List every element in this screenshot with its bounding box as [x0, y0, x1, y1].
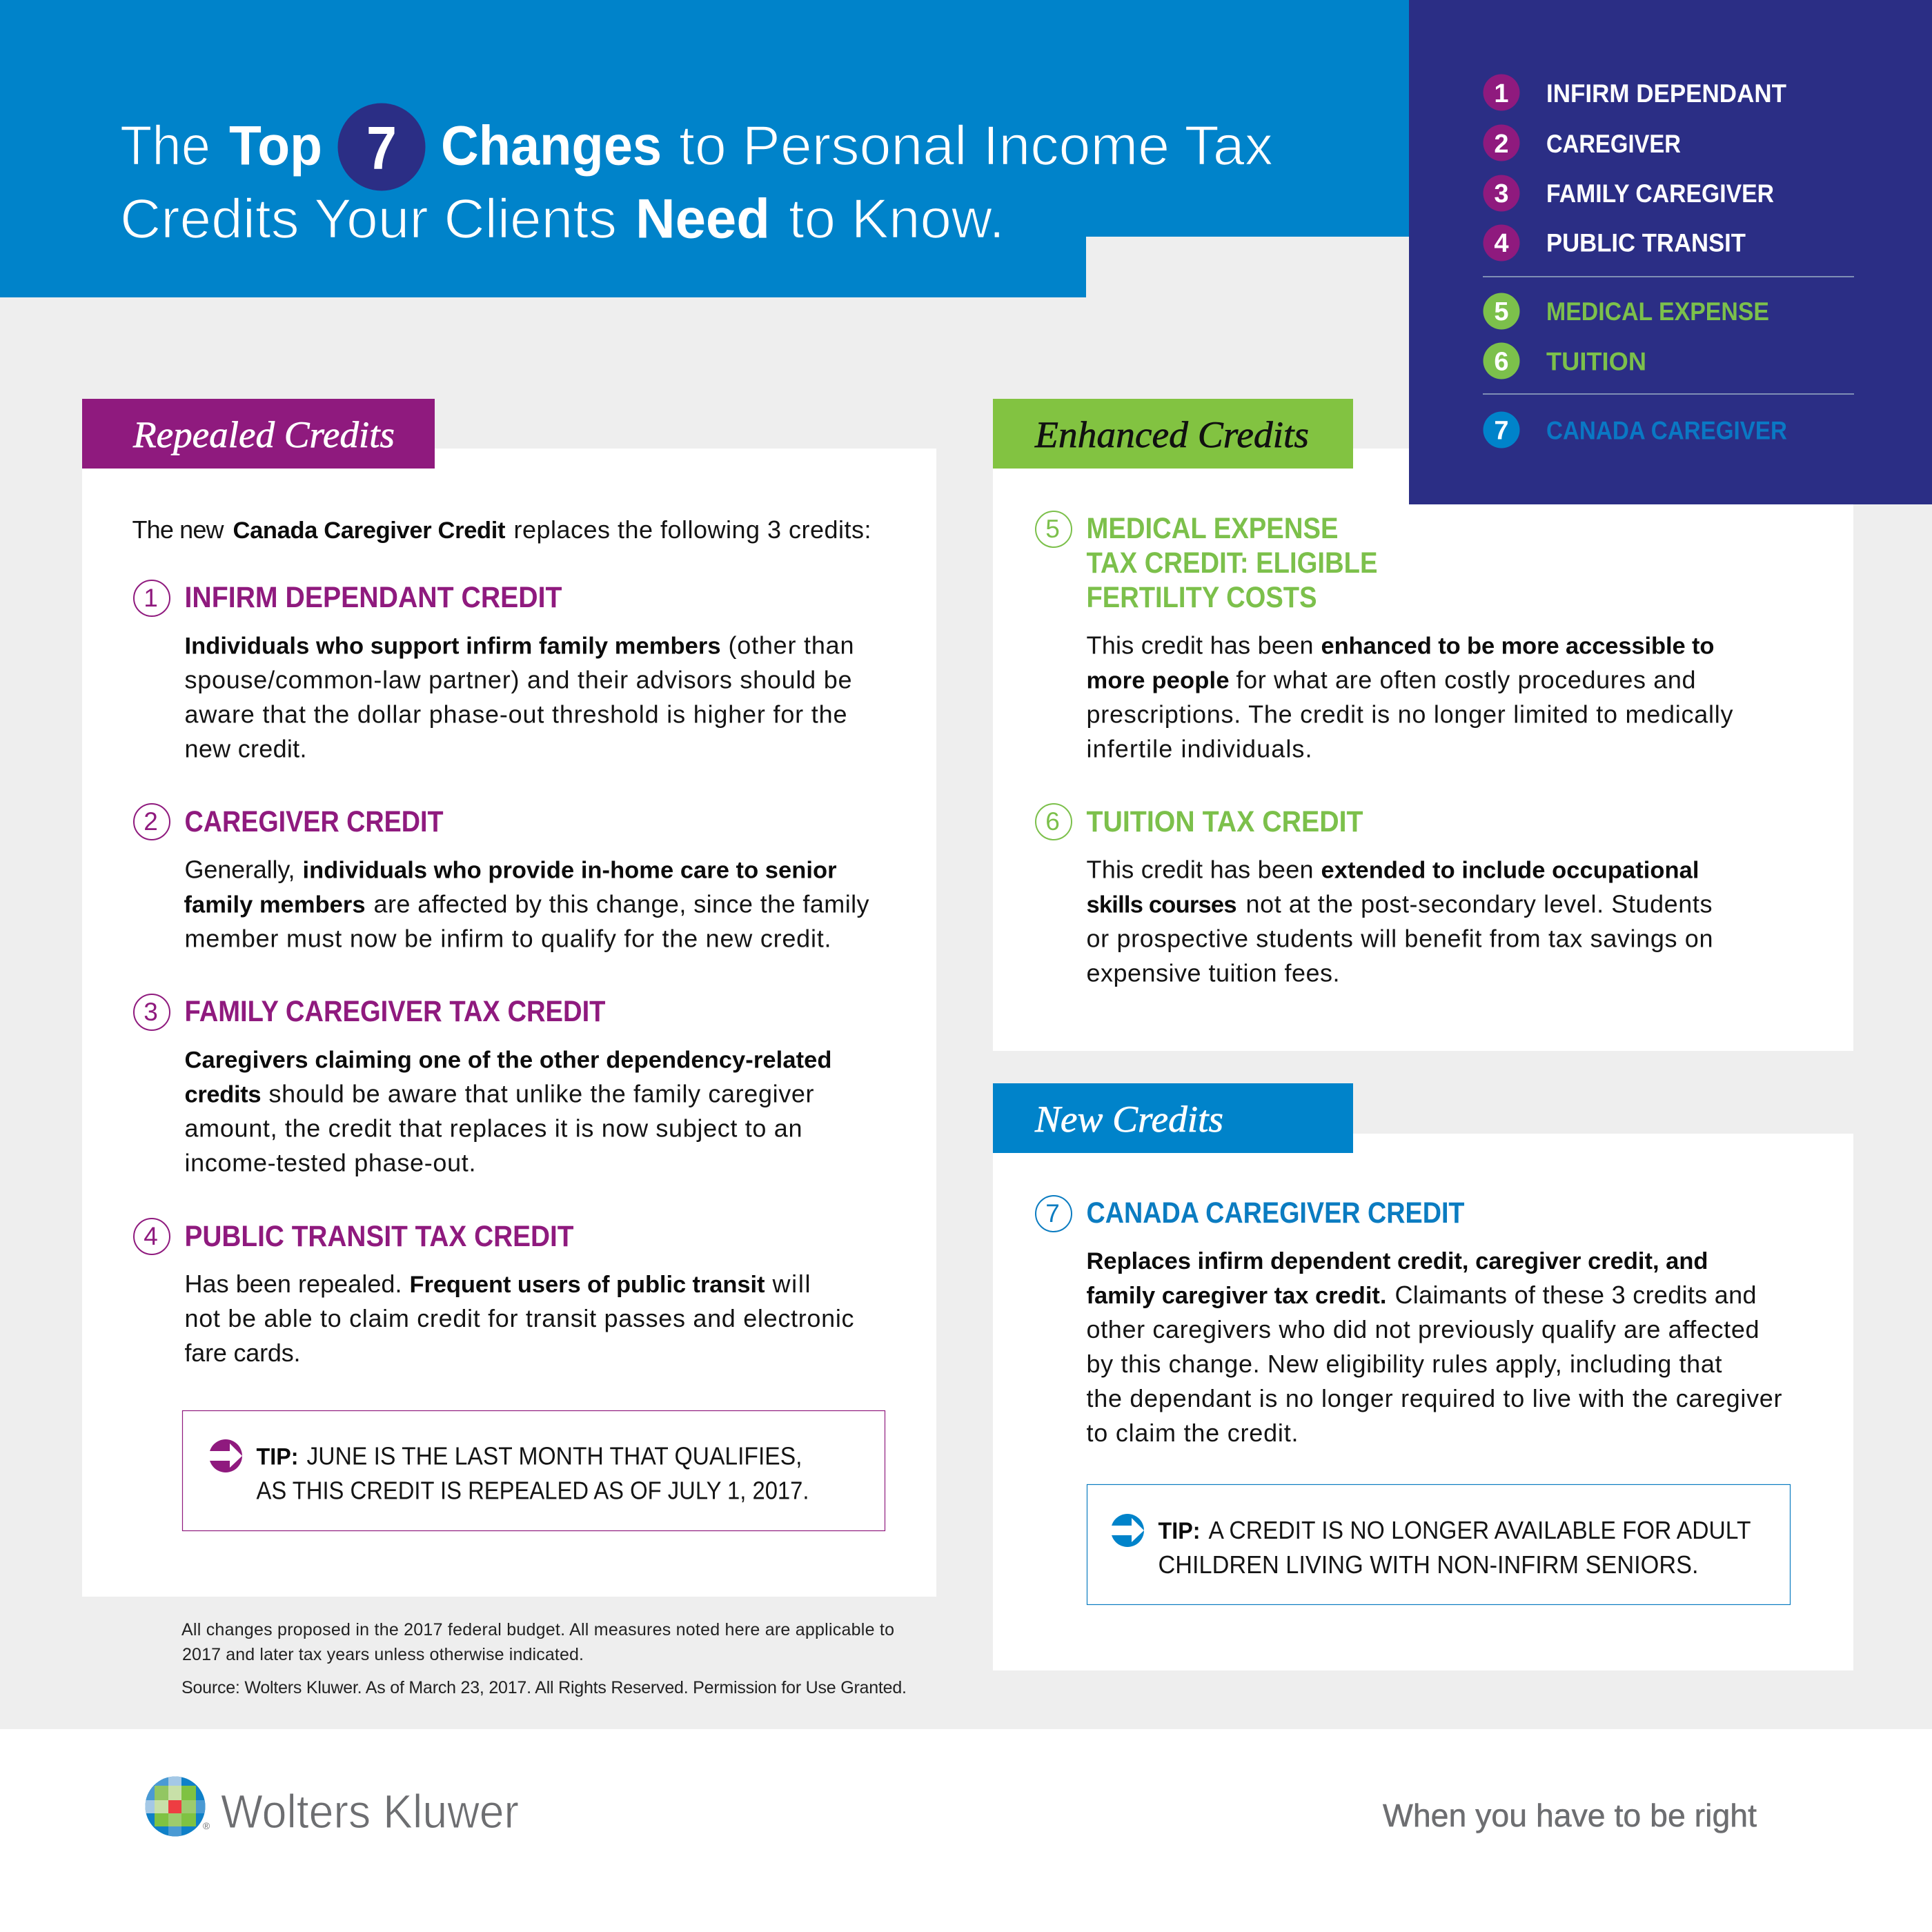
tip box: new: A CREDIT IS NO LONGER AVAILABLE FOR ADULT: [1209, 1516, 1751, 1544]
footnotes: [181, 1620, 907, 1697]
item 2: caregiver credit: family members: [184, 892, 366, 918]
item 2: caregiver credit: [134, 804, 869, 953]
item 3: family caregiver tax credit: 3: [144, 998, 158, 1026]
title: Credits Your Clients: [120, 188, 617, 250]
footnotes: Source: Wolters Kluwer. As of March 23, 2017. All Rights Reserved. Permission for Use Granted.: [181, 1678, 907, 1697]
title: to Know.: [789, 188, 1005, 250]
item 1: infirm dependant credit: new credit.: [185, 735, 306, 763]
legend item 3: FAMILY CAREGIVER: [1546, 179, 1774, 208]
panel: repealed credits: [82, 399, 936, 1597]
item 7: canada caregiver credit: 7: [1045, 1199, 1060, 1228]
item 3: family caregiver tax credit: Caregivers claiming one of the other dependency-related: [185, 1047, 832, 1074]
logo: wolters kluwer: Wolters Kluwer: [221, 1785, 519, 1838]
item 1: infirm dependant credit: Individuals who support infirm family members: [185, 633, 720, 660]
panel: new credits: [993, 1083, 1853, 1670]
logo: wolters kluwer: ®: [203, 1820, 210, 1831]
item 1: infirm dependant credit: (other than: [729, 631, 854, 660]
item 7: canada caregiver credit: Claimants of these 3 credits and: [1395, 1281, 1757, 1309]
icon: globe mosaic: [145, 1776, 206, 1837]
logo: wolters kluwer: [145, 1776, 519, 1838]
item 5: medical expense tax credit: prescriptions. The credit is no longer limited to medically: [1086, 700, 1733, 729]
legend item 1: INFIRM DEPENDANT: [1546, 79, 1786, 108]
item 4: public transit tax credit: Frequent users of public transit: [410, 1272, 765, 1298]
item 4: public transit tax credit: 4: [144, 1222, 158, 1250]
tag: new credits: New Credits: [1034, 1098, 1223, 1140]
tag: repealed credits: Repealed Credits: [132, 414, 395, 455]
intro text: replaces the following 3 credits:: [513, 515, 871, 544]
item 4: public transit tax credit: will: [771, 1270, 810, 1298]
item 3: family caregiver tax credit: amount, the credit that replaces it is now subject to an: [185, 1114, 802, 1143]
item 2: caregiver credit: individuals who provide in-home care to senior: [302, 858, 836, 884]
item 1: infirm dependant credit: 1: [144, 584, 158, 612]
item 1: infirm dependant credit: spouse/common-law partner) and their advisors should be: [185, 666, 851, 694]
item 5: medical expense tax credit: FERTILITY COSTS: [1086, 581, 1317, 614]
tip box: new: [1087, 1485, 1790, 1605]
tag: enhanced credits: Enhanced Credits: [1034, 414, 1309, 455]
footnotes: All changes proposed in the 2017 federal budget. All measures noted here are applicable to: [181, 1620, 894, 1639]
legend item 5: [1483, 293, 1769, 330]
item 7: canada caregiver credit: other caregivers who did not previously qualify are affected: [1086, 1315, 1759, 1343]
legend item 3: [1483, 175, 1774, 211]
header banner: [0, 0, 1409, 297]
legend item 6: 6: [1494, 348, 1509, 377]
legend item 1: [1483, 75, 1786, 110]
legend item 6: TUITION: [1546, 348, 1646, 375]
panel: enhanced credits: [993, 399, 1853, 1051]
tip box: repealed: [182, 1410, 885, 1530]
item 6: tuition tax credit: TUITION TAX CREDIT: [1086, 805, 1363, 838]
item 4: public transit tax credit: not be able to claim credit for transit passes and electronic: [185, 1304, 854, 1332]
item 5: medical expense tax credit: infertile individuals.: [1086, 735, 1312, 763]
item 3: family caregiver tax credit: should be aware that unlike the family caregiver: [269, 1080, 814, 1108]
item 6: tuition tax credit: skills courses: [1086, 892, 1236, 918]
item 7: canada caregiver credit: CANADA CAREGIVER CREDIT: [1086, 1196, 1464, 1230]
tip box: repealed: TIP:: [257, 1444, 298, 1470]
item 2: caregiver credit: member must now be infirm to qualify for the new credit.: [185, 925, 831, 953]
footnotes: 2017 and later tax years unless otherwise indicated.: [182, 1645, 584, 1664]
icon: arrow: [207, 1439, 242, 1472]
intro text: The new: [132, 515, 225, 544]
item 6: tuition tax credit: 6: [1045, 807, 1060, 836]
item 2: caregiver credit: 2: [144, 807, 158, 836]
item 5: medical expense tax credit: for what are often costly procedures and: [1236, 666, 1696, 694]
title: [120, 103, 1273, 250]
item 7: canada caregiver credit: [1036, 1196, 1782, 1447]
item 4: public transit tax credit: Has been repealed.: [185, 1270, 402, 1298]
title: 7: [366, 114, 397, 182]
title: The: [120, 115, 210, 177]
title: Changes: [441, 115, 662, 177]
title: Top: [229, 115, 322, 177]
legend item 6: [1483, 342, 1646, 379]
item 2: caregiver credit: CAREGIVER CREDIT: [185, 805, 443, 838]
item 6: tuition tax credit: expensive tuition fees.: [1086, 959, 1340, 987]
item 6: tuition tax credit: or prospective students will benefit from tax savings on: [1086, 925, 1713, 953]
legend item 7: 7: [1494, 417, 1509, 446]
item 5: medical expense tax credit: more people: [1086, 668, 1230, 694]
item 5: medical expense tax credit: This credit has been: [1086, 631, 1314, 660]
tag: new credits: [993, 1083, 1353, 1153]
legend item 7: CANADA CAREGIVER: [1546, 417, 1787, 444]
title: to Personal Income Tax: [679, 115, 1273, 177]
legend item 1: 1: [1494, 79, 1509, 108]
tip box: repealed: JUNE IS THE LAST MONTH THAT QUALIFIES,: [306, 1442, 802, 1470]
item 1: infirm dependant credit: aware that the dollar phase-out threshold is higher for the: [185, 700, 847, 729]
item 5: medical expense tax credit: 5: [1045, 515, 1060, 543]
tip box: new: TIP:: [1158, 1518, 1201, 1544]
legend item 3: 3: [1494, 179, 1509, 208]
item 6: tuition tax credit: not at the post-secondary level. Students: [1246, 890, 1713, 918]
tag: repealed credits: [82, 399, 435, 469]
legend item 4: [1483, 225, 1746, 261]
legend item 4: 4: [1494, 229, 1509, 258]
item 4: public transit tax credit: [134, 1219, 854, 1367]
item 7: canada caregiver credit: Replaces infirm dependent credit, caregiver credit, and: [1086, 1248, 1708, 1274]
item 2: caregiver credit: are affected by this change, since the family: [374, 890, 869, 918]
legend item 5: MEDICAL EXPENSE: [1546, 297, 1769, 326]
item 7: canada caregiver credit: the dependant is no longer required to live with the caregiver: [1086, 1384, 1782, 1412]
item 5: medical expense tax credit: enhanced to be more accessible to: [1321, 633, 1714, 660]
item 4: public transit tax credit: PUBLIC TRANSIT TAX CREDIT: [185, 1220, 574, 1253]
item 3: family caregiver tax credit: [134, 994, 832, 1177]
icon: arrow: [1109, 1514, 1144, 1547]
legend item 2: 2: [1494, 130, 1509, 159]
intro text: Canada Caregiver Credit: [233, 518, 506, 544]
intro text: [132, 515, 871, 544]
legend item 4: PUBLIC TRANSIT: [1546, 229, 1746, 257]
legend item 2: CAREGIVER: [1546, 130, 1681, 158]
item 6: tuition tax credit: extended to include occupational: [1321, 858, 1699, 884]
title: Need: [635, 188, 770, 250]
item 7: canada caregiver credit: by this change. New eligibility rules apply, including that: [1086, 1350, 1722, 1378]
item 1: infirm dependant credit: [134, 580, 854, 763]
item 7: canada caregiver credit: to claim the credit.: [1086, 1419, 1299, 1447]
legend item 2: [1483, 124, 1681, 161]
item 1: infirm dependant credit: INFIRM DEPENDANT CREDIT: [185, 581, 562, 614]
item 3: family caregiver tax credit: credits: [185, 1082, 261, 1108]
item 5: medical expense tax credit: MEDICAL EXPENSE: [1086, 512, 1339, 545]
tagline: When you have to be right: [1383, 1797, 1757, 1833]
tag: enhanced credits: [993, 399, 1353, 469]
tip box: repealed: AS THIS CREDIT IS REPEALED AS OF JULY 1, 2017.: [257, 1477, 809, 1505]
item 5: medical expense tax credit: [1036, 511, 1733, 763]
legend panel: [1409, 0, 1932, 504]
item 5: medical expense tax credit: TAX CREDIT: ELIGIBLE: [1086, 546, 1377, 580]
legend item 5: 5: [1494, 297, 1509, 326]
item 6: tuition tax credit: [1036, 804, 1713, 987]
legend item 7: [1483, 411, 1787, 448]
item 6: tuition tax credit: This credit has been: [1086, 856, 1314, 884]
item 3: family caregiver tax credit: FAMILY CAREGIVER TAX CREDIT: [185, 995, 606, 1028]
item 7: canada caregiver credit: family caregiver tax credit.: [1086, 1283, 1387, 1309]
tip box: new: CHILDREN LIVING WITH NON-INFIRM SENIORS.: [1158, 1550, 1699, 1579]
item 4: public transit tax credit: fare cards.: [185, 1339, 301, 1367]
item 2: caregiver credit: Generally,: [185, 856, 295, 884]
item 3: family caregiver tax credit: income-tested phase-out.: [185, 1149, 476, 1177]
